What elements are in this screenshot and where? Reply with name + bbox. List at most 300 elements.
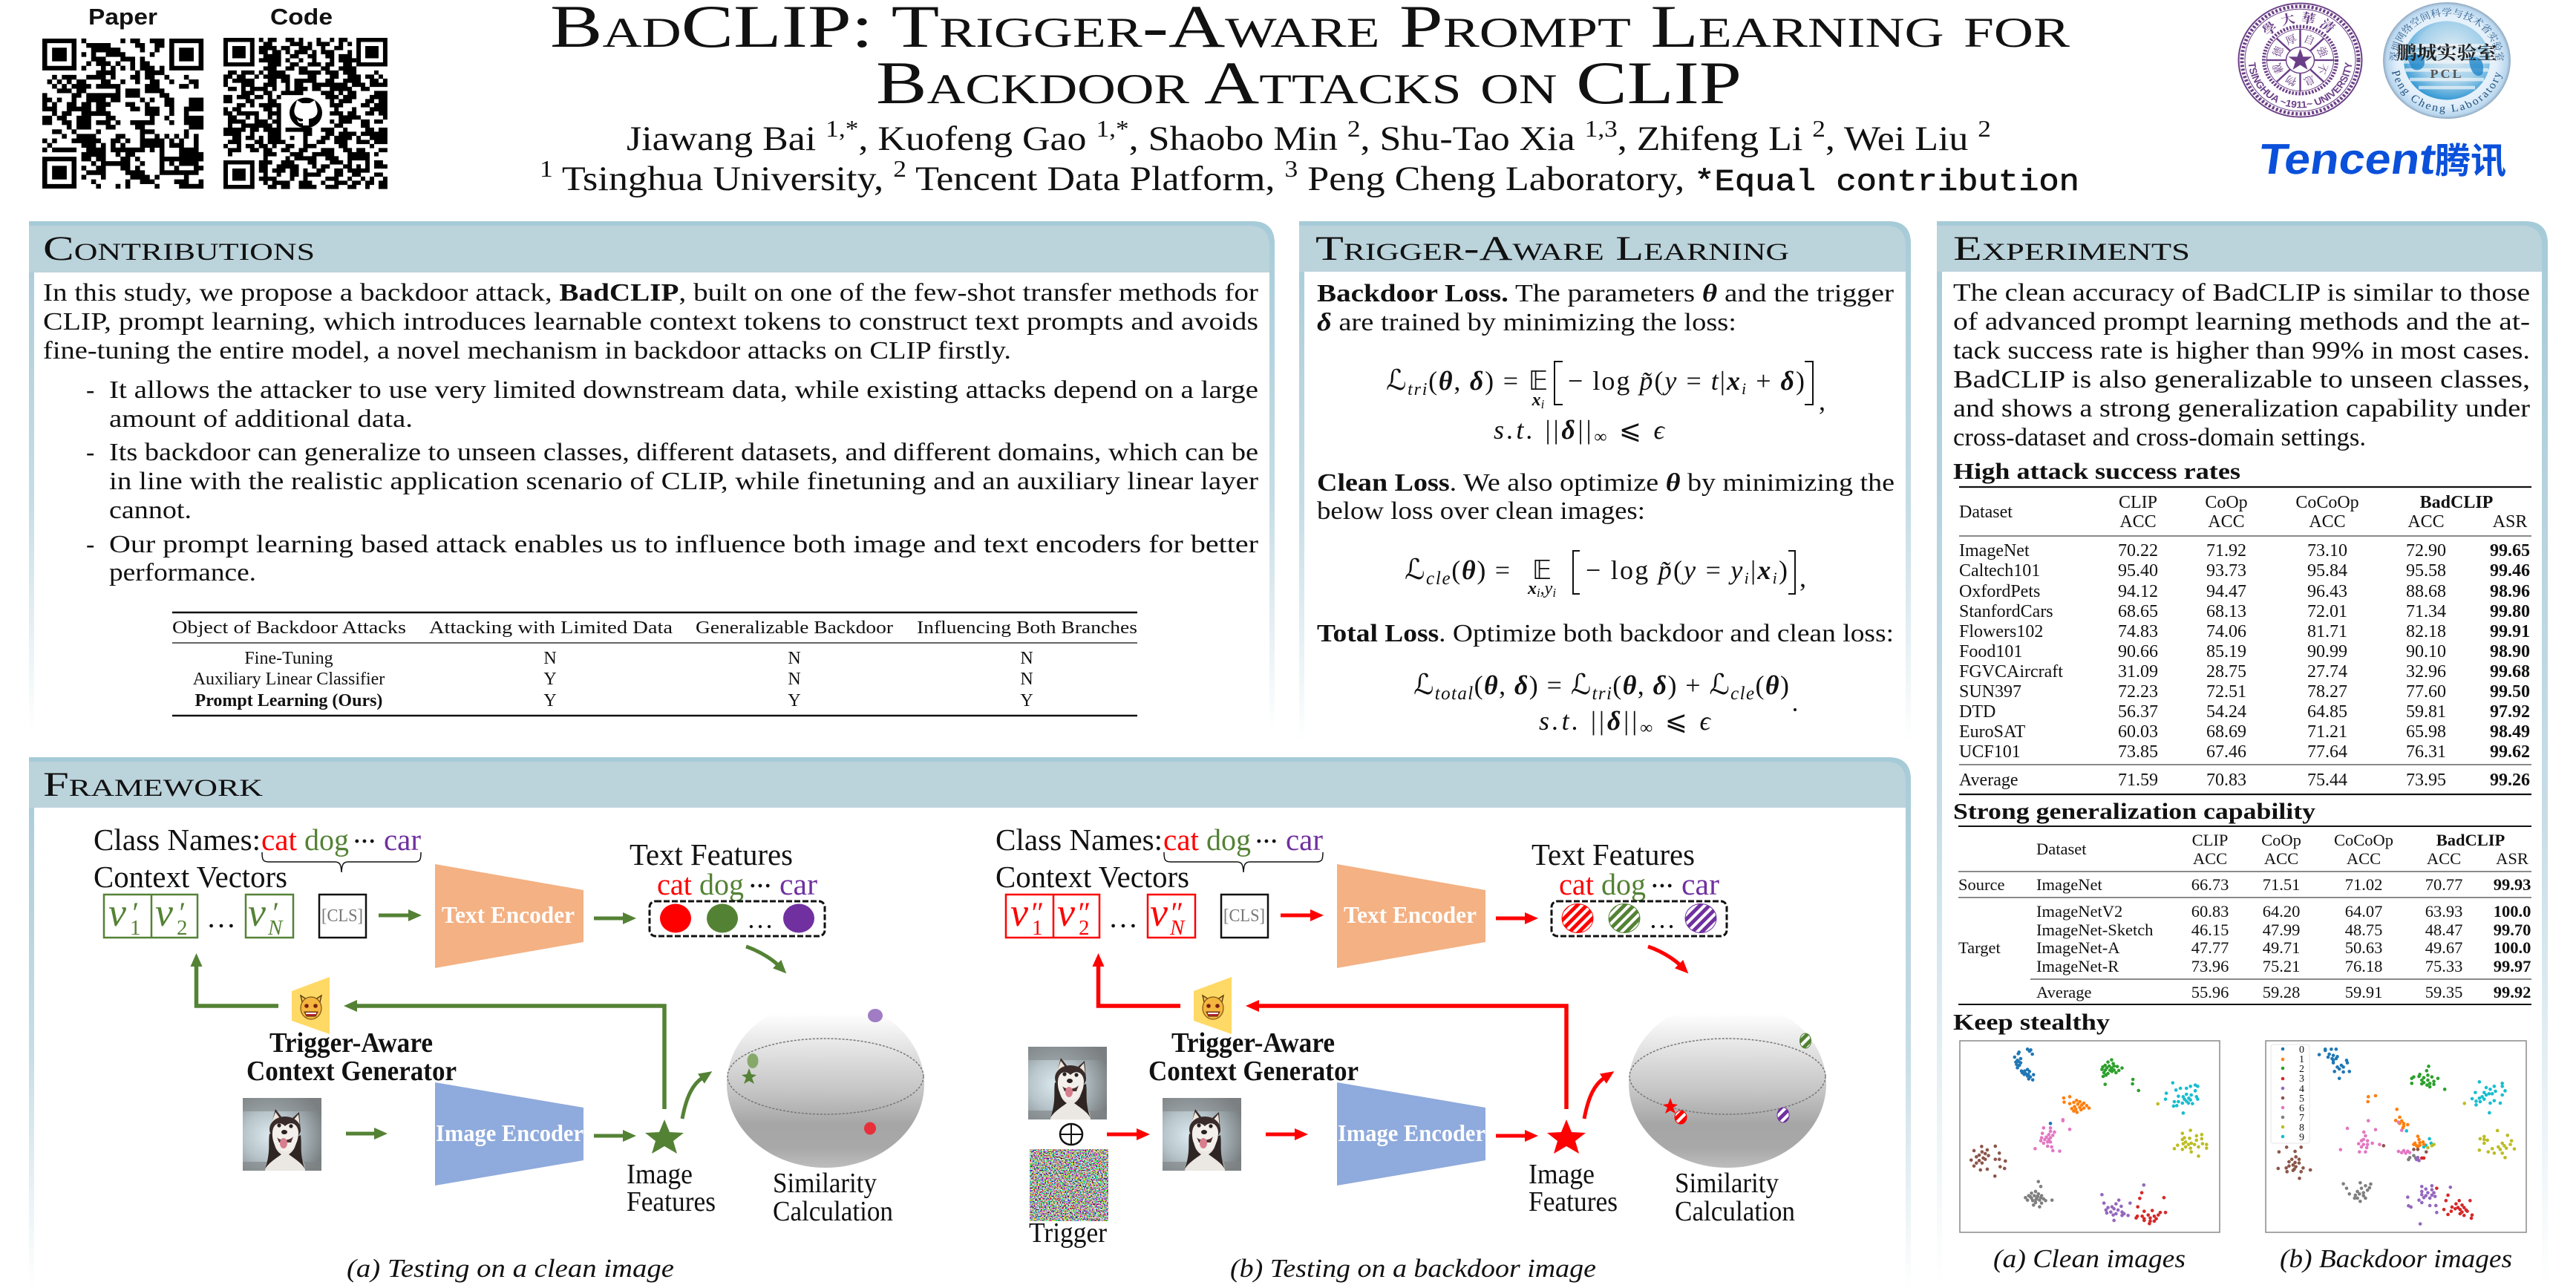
table: attack success rates: ACC — [2407, 512, 2445, 532]
table: generalization: 48.75 — [2345, 921, 2382, 939]
table: attack success rates: UCF101 — [1959, 742, 2021, 762]
comparison table: Y — [543, 691, 557, 710]
arrow: image features to generator — [356, 1006, 664, 1109]
affiliations: Tencent Data Platform, — [906, 160, 1285, 198]
bullet list: It allows the attacker to use very limited downstream data, while existing attacks depend on a large — [109, 376, 1258, 404]
authors: 2 — [1347, 115, 1361, 142]
equation: backdoor loss: i — [1541, 397, 1545, 411]
table: generalization: 47.77 — [2191, 938, 2229, 957]
logo: Peng Cheng Laboratory: Peng Cheng Laboratory — [2392, 70, 2503, 114]
table: attack success rates: 73.85 — [2118, 742, 2158, 762]
table: attack success rates: Flowers102 — [1959, 622, 2043, 641]
table: generalization: 59.91 — [2345, 983, 2382, 1001]
panel: trigger-aware learning — [1299, 221, 1911, 742]
logo: Peng Cheng Laboratory: 深圳网络空间科学与技术省实验室 — [2389, 7, 2505, 61]
context vectors: ″ — [1076, 896, 1090, 929]
text block: intro — [43, 279, 1259, 365]
class names: cat — [1163, 823, 1200, 857]
image features label: Image — [627, 1159, 693, 1190]
similarity calculation label: Similarity — [773, 1168, 877, 1199]
scatter plot: clean images — [1960, 1041, 2220, 1232]
logo: Peng Cheng Laboratory — [2383, 2, 2511, 119]
equation: total loss: ℒ — [1413, 668, 1434, 701]
table: generalization: Target — [1958, 938, 2001, 957]
bullet list: - — [86, 531, 94, 558]
table: attack success rates: 77.60 — [2406, 682, 2446, 702]
table: attack success rates: Caltech101 — [1959, 561, 2040, 581]
heading: High attack success rates: High attack success rates — [1953, 458, 2240, 484]
label: Paper: Paper — [88, 4, 157, 30]
bullet list: amount of additional data. — [109, 405, 413, 433]
text encoder: Text Encoder — [442, 901, 575, 928]
context vectors: 1 — [1032, 916, 1042, 940]
equation: total loss: ∞ — [1640, 719, 1653, 738]
table: attack success rates: 68.69 — [2206, 722, 2246, 742]
image features label — [627, 1159, 716, 1217]
bullet list: performance. — [109, 559, 256, 586]
equation: backdoor loss: + — [1748, 366, 1779, 396]
legend: 9 — [2299, 1132, 2304, 1143]
table: attack success rates: 71.21 — [2307, 722, 2347, 742]
table: attack success rates: ImageNet — [1959, 541, 2030, 560]
logo: Tsinghua University: 物 — [2284, 73, 2299, 88]
table: generalization: 100.0 — [2494, 938, 2531, 957]
context vectors: 2 — [177, 916, 187, 940]
legend: 0 — [2299, 1045, 2304, 1056]
equation: clean loss: θ) = — [1462, 555, 1510, 585]
table: generalization: 66.73 — [2191, 875, 2229, 894]
bullet list: cannot. — [109, 497, 192, 524]
icon: GitHub logo in QR — [290, 98, 322, 128]
text features: dog — [699, 867, 744, 901]
table: attack success rates: 70.22 — [2118, 541, 2158, 560]
class names: Class Names: — [94, 823, 261, 857]
trigger-aware context generator — [1148, 977, 1359, 1087]
table: generalization: 99.97 — [2494, 957, 2531, 975]
arrow: generator to context vectors — [196, 965, 278, 1006]
arrow — [1496, 1134, 1526, 1137]
equation: clean loss: | — [1750, 555, 1756, 585]
equation: total loss: ⩽ — [1655, 706, 1697, 736]
equation: backdoor loss: ( — [1428, 366, 1437, 396]
table: generalization: Source — [1958, 875, 2004, 894]
text block: experiment summary: tack success rate is higher than 99% in most cases. — [1953, 337, 2530, 365]
table: attack success rates: Dataset — [1959, 503, 2013, 522]
equation: backdoor loss: ℒ — [1386, 364, 1406, 396]
table: attack success rates: 99.46 — [2490, 561, 2530, 581]
table: attack success rates: 67.46 — [2206, 742, 2246, 762]
similarity calculation label: Similarity — [1675, 1168, 1779, 1199]
table: attack success rates: 73.10 — [2307, 541, 2347, 560]
table: generalization: 49.71 — [2263, 938, 2300, 957]
diagram: testing on a backdoor image — [996, 823, 1826, 1283]
heading: Contributions: Contributions — [43, 229, 315, 268]
table: attack success rates: ACC — [2119, 512, 2157, 532]
arrow — [594, 1134, 624, 1137]
arrow — [1266, 1133, 1296, 1136]
context vectors: 1 — [130, 916, 141, 940]
text features: … — [747, 904, 774, 934]
table: attack success rates: 90.99 — [2307, 642, 2347, 661]
table: attack success rates: 93.73 — [2206, 561, 2246, 581]
caption (a): (a) Testing on a clean image — [347, 1254, 674, 1283]
table: attack success rates: 95.84 — [2307, 561, 2347, 581]
class names — [996, 823, 1323, 872]
equation: clean loss: − log p̃(y = y — [1586, 555, 1742, 585]
legend: 5 — [2299, 1094, 2304, 1105]
comparison table: N — [788, 670, 801, 689]
comparison table: N — [1020, 649, 1033, 668]
authors: 1,* — [1096, 115, 1129, 142]
logo: Peng Cheng Laboratory: 鹏城实验室 — [2397, 43, 2497, 63]
table: generalization: 47.99 — [2263, 921, 2300, 939]
table: attack success rates: 74.83 — [2118, 622, 2158, 641]
table: attack success rates: 99.26 — [2490, 771, 2530, 790]
arrow — [1107, 1133, 1138, 1136]
legend: 4 — [2299, 1084, 2304, 1095]
text features — [1531, 837, 1727, 936]
table: generalization: Dataset — [2036, 840, 2087, 858]
affiliations: *Equal contribution — [1694, 166, 2079, 200]
comparison table: Y — [543, 670, 557, 689]
authors: 2 — [1812, 115, 1825, 142]
heading: Experiments: Experiments — [1953, 229, 2190, 268]
trigger-aware context generator: Trigger-Aware — [269, 1027, 433, 1059]
table: attack success rates: 31.09 — [2118, 662, 2158, 681]
trigger noise — [1030, 1149, 1108, 1221]
heading: Trigger-Aware Learning: Trigger-Aware Learning — [1315, 229, 1789, 268]
trigger-aware context generator: Context Generator — [1148, 1056, 1359, 1087]
equation: total loss — [1413, 668, 1797, 738]
legend: 6 — [2299, 1103, 2304, 1114]
authors: 1,3 — [1585, 115, 1618, 142]
similarity calculation label: Calculation — [773, 1196, 893, 1227]
table: attack success rates: SUN397 — [1959, 682, 2021, 702]
text features: Text Features — [630, 837, 793, 872]
authors: , Shu-Tao Xia — [1361, 120, 1585, 158]
table: attack success rates: 99.68 — [2490, 662, 2530, 681]
affiliations: Peng Cheng Laboratory, — [1298, 160, 1694, 198]
equation: total loss: θ, δ) = ℒ — [1484, 668, 1591, 701]
table: attack success rates: 32.96 — [2406, 662, 2446, 681]
logo: Tencent: Tencent — [2256, 135, 2439, 183]
text block: intro: fine-tuning the entire model, a novel mechanism in backdoor attacks on CLIP firstly. — [43, 337, 1011, 365]
image encoder — [1337, 1082, 1485, 1186]
table: attack success rates: 77.64 — [2307, 742, 2347, 762]
similarity calculation label — [773, 1168, 893, 1227]
equation: backdoor loss: δ) — [1781, 366, 1805, 396]
arrow — [1281, 913, 1312, 918]
equation: clean loss: ) — [1779, 555, 1788, 585]
logo: Tsinghua University: 厚 — [2284, 33, 2299, 48]
affiliations: 3 — [1285, 155, 1298, 182]
header: QR codes — [42, 4, 388, 189]
trigger-aware context generator: Trigger-Aware — [1171, 1027, 1335, 1059]
table: generalization: ACC — [2347, 849, 2381, 868]
text features: car — [779, 867, 817, 901]
equation: backdoor loss: x — [1532, 390, 1541, 410]
equation: backdoor loss: ⩽ — [1609, 415, 1651, 445]
table: attack success rates: BadCLIP — [2420, 493, 2493, 512]
table: attack success rates: 72.23 — [2118, 682, 2158, 702]
table: attack success rates: 68.13 — [2206, 602, 2246, 621]
table: attack success rates: StanfordCars — [1959, 602, 2053, 621]
text: backdoor loss — [1317, 280, 1895, 336]
table: attack success rates: 96.43 — [2307, 582, 2347, 601]
logo: Tsinghua University: 德 — [2270, 45, 2286, 59]
table: generalization: 63.93 — [2425, 902, 2462, 921]
equation: clean loss: i — [1537, 586, 1540, 600]
comparison table: Y — [1020, 691, 1033, 710]
text block: experiment summary: and shows a strong generalization capability under — [1953, 395, 2531, 422]
authors: , Shaobo Min — [1129, 120, 1347, 158]
comparison table: Object of Backdoor Attacks — [172, 618, 406, 638]
table: attack success rates: 82.18 — [2406, 622, 2446, 641]
equation: backdoor loss: 𝔼 — [1529, 366, 1548, 396]
label: trigger: Trigger — [1029, 1217, 1107, 1249]
table: generalization — [1958, 826, 2531, 1004]
table: generalization: 100.0 — [2494, 902, 2531, 921]
text block: experiment summary: The clean accuracy of BadCLIP is similar to those — [1953, 279, 2530, 307]
table: attack success rates: FGVCAircraft — [1959, 662, 2063, 681]
text: backdoor loss: δ are trained by minimizing the loss: — [1317, 309, 1736, 336]
table: generalization: 71.51 — [2263, 875, 2300, 894]
equation: clean loss: x — [1528, 579, 1537, 598]
equation: total loss: ( — [1612, 670, 1621, 700]
image encoder: Image Encoder — [436, 1119, 583, 1146]
equation: backdoor loss: ∞ — [1594, 428, 1606, 447]
table: attack success rates: 70.83 — [2206, 771, 2246, 790]
heading: Keep stealthy: Keep stealthy — [1953, 1009, 2111, 1035]
table: generalization: 71.02 — [2345, 875, 2382, 894]
class names: ··· — [1254, 824, 1279, 858]
class names: dog — [304, 823, 349, 857]
table: generalization: ImageNet-A — [2036, 938, 2120, 957]
table: attack success rates: 99.91 — [2490, 622, 2530, 641]
text encoder — [1337, 864, 1485, 968]
context vectors: [CLS] — [1223, 906, 1265, 926]
table: attack success rates: 90.66 — [2118, 642, 2158, 661]
class names: Class Names: — [996, 823, 1163, 857]
similarity calculation label — [1675, 1168, 1795, 1227]
image encoder: Image Encoder — [1338, 1119, 1485, 1146]
context vectors: v — [1010, 890, 1028, 935]
equation: backdoor loss — [1386, 362, 1825, 447]
affiliations: Tsinghua University, — [553, 160, 893, 198]
text features: dog — [1601, 867, 1646, 901]
table: attack success rates: 71.34 — [2406, 602, 2446, 621]
logo: Tsinghua University: 不 — [2314, 62, 2330, 76]
bullet list: - — [86, 439, 94, 466]
table: attack success rates: EuroSAT — [1959, 722, 2026, 742]
similarity calculation label: Calculation — [1675, 1196, 1795, 1227]
panel: contributions — [29, 221, 1275, 731]
heading: Strong generalization capability: Strong generalization capability — [1953, 798, 2316, 824]
logo: Tsinghua University: 息 — [2301, 73, 2317, 88]
class names: cat — [261, 823, 298, 857]
legend: 3 — [2299, 1073, 2304, 1085]
table: attack success rates: 95.40 — [2118, 561, 2158, 581]
table: generalization: 70.77 — [2425, 875, 2462, 894]
table: attack success rates: 28.75 — [2206, 662, 2246, 681]
image features label: Features — [627, 1186, 716, 1217]
logo: Tsinghua University: TSINGHUA ~1911~ UNIVERSITY — [2248, 62, 2352, 108]
arrow: image features to sphere — [1584, 1078, 1604, 1119]
bullet list: Its backdoor can generalize to unseen classes, different datasets, and different domains, which can be — [109, 439, 1258, 466]
logo: Tencent: 腾讯 — [2435, 131, 2506, 183]
text block: experiment summary: of advanced prompt learning methods and the at- — [1953, 308, 2530, 336]
comparison table: Y — [788, 691, 801, 710]
table: attack success rates: 98.90 — [2490, 642, 2530, 661]
text: backdoor loss: Backdoor Loss. The parameters θ and the trigger — [1317, 280, 1895, 307]
table: attack success rates: 78.27 — [2307, 682, 2347, 702]
context vectors: 2 — [1079, 916, 1090, 940]
text: clean loss: Clean Loss . We also optimize θ by minimizing the — [1317, 469, 1895, 497]
table: generalization: ACC — [2193, 849, 2227, 868]
context vectors: [CLS] — [321, 906, 363, 926]
table: generalization: ACC — [2427, 849, 2461, 868]
logo: Tsinghua University: 自 — [2301, 33, 2317, 48]
table: attack success rates: 76.31 — [2406, 742, 2446, 762]
context vectors: v — [1150, 890, 1168, 935]
context vectors: ′ — [271, 896, 278, 929]
table: generalization: ACC — [2264, 849, 2298, 868]
text features: Text Features — [1531, 837, 1695, 872]
table: attack success rates: 56.37 — [2118, 702, 2158, 722]
context vectors: v — [248, 890, 266, 935]
equation: clean loss: i — [1773, 569, 1777, 587]
context vectors: N — [1169, 916, 1186, 940]
logo: Tsinghua University: 學大華清 — [2262, 11, 2335, 34]
trigger-aware context generator: Context Generator — [246, 1056, 457, 1087]
comparison table — [172, 612, 1137, 716]
table: attack success rates: 88.68 — [2406, 582, 2446, 601]
table: attack success rates: 95.58 — [2406, 561, 2446, 581]
text features: ··· — [1650, 869, 1675, 903]
poisoned dog image — [1163, 1098, 1241, 1171]
text features: cat — [1559, 867, 1595, 901]
image features label — [1529, 1159, 1618, 1217]
table: generalization: 59.28 — [2263, 983, 2300, 1001]
context vectors: ′ — [131, 896, 138, 929]
arrow: text features to sphere — [746, 947, 778, 965]
table: attack success rates: 72.90 — [2406, 541, 2446, 560]
comparison table: N — [788, 649, 801, 668]
text features: … — [1649, 904, 1676, 934]
arrow — [346, 1131, 376, 1136]
star: image feature — [645, 1119, 684, 1154]
clean dog image — [1028, 1047, 1107, 1119]
table: attack success rates: 65.98 — [2406, 722, 2446, 742]
table: attack success rates: 74.06 — [2206, 622, 2246, 641]
logo: Tsinghua University: 強 — [2314, 45, 2330, 59]
text block: experiment summary: BadCLIP is also generalizable to unseen classes, — [1953, 366, 2530, 393]
bullet list: Our prompt learning based attack enables us to influence both image and text encoders for better — [109, 531, 1259, 558]
comparison table: Attacking with Limited Data — [429, 618, 673, 638]
authors: 1,* — [826, 115, 858, 142]
text features: cat — [657, 867, 693, 901]
label: Code: Code — [270, 4, 333, 30]
authors: 2 — [1978, 115, 1991, 142]
table: attack success rates: Food101 — [1959, 642, 2022, 661]
table: attack success rates: 98.49 — [2490, 722, 2530, 742]
table: attack success rates: 99.65 — [2490, 541, 2530, 560]
table: generalization: 48.47 — [2425, 921, 2462, 939]
table: generalization: 99.93 — [2494, 875, 2531, 894]
table: attack success rates: 72.51 — [2206, 682, 2246, 702]
table: generalization: ImageNet — [2036, 875, 2102, 894]
table: attack success rates: 54.24 — [2206, 702, 2246, 722]
text: clean loss — [1317, 469, 1895, 525]
table: attack success rates: 94.12 — [2118, 582, 2158, 601]
table: attack success rates: 75.44 — [2307, 771, 2347, 790]
logo: Tencent — [2256, 131, 2506, 183]
caption (b): (b) Testing on a backdoor image — [1230, 1254, 1596, 1283]
table: generalization: 50.63 — [2345, 938, 2382, 957]
comparison table: Prompt Learning (Ours) — [195, 691, 382, 710]
table: attack success rates: 99.50 — [2490, 682, 2530, 702]
table: attack success rates: 59.81 — [2406, 702, 2446, 722]
text block: intro: In this study, we propose a backdoor attack, BadCLIP , built on one of the few-shot transfer methods for — [43, 279, 1259, 307]
table: attack success rates: 68.65 — [2118, 602, 2158, 621]
equation: backdoor loss: − log p̃(y = t|x — [1568, 366, 1740, 396]
table: generalization: 60.83 — [2191, 902, 2229, 921]
table: generalization: 55.96 — [2191, 983, 2229, 1001]
logo: Tsinghua University: 載 — [2270, 62, 2286, 76]
table: attack success rates: CLIP — [2119, 493, 2157, 512]
text features: car — [1681, 867, 1719, 901]
table: attack success rates: 60.03 — [2118, 722, 2158, 742]
equation: backdoor loss: s.t. ||δ|| — [1494, 415, 1592, 445]
similarity sphere — [1629, 1000, 1826, 1168]
text block: intro: CLIP, prompt learning, which introduces learnable context tokens to construct text prompts and avoids — [43, 308, 1258, 336]
table: generalization: CLIP — [2192, 831, 2228, 849]
text encoder: Text Encoder — [1344, 901, 1477, 928]
equation: total loss: ( — [1474, 670, 1483, 700]
comparison table: Auxiliary Linear Classifier — [193, 670, 385, 689]
table: generalization: 49.67 — [2425, 938, 2462, 957]
arrow — [594, 916, 624, 921]
table: generalization: CoCoOp — [2334, 831, 2393, 849]
context vectors — [996, 860, 1268, 940]
text features — [630, 837, 825, 936]
bullet list — [86, 376, 1259, 586]
panel: experiments — [1937, 221, 2548, 1288]
class names: car — [1286, 823, 1323, 857]
panel: framework — [29, 757, 1911, 1288]
QR code: code repository — [223, 38, 388, 189]
authors: , Wei Liu — [1825, 120, 1978, 158]
table: attack success rates: CoCoOp — [2295, 493, 2359, 512]
equation: backdoor loss: i — [1742, 379, 1746, 398]
table: attack success rates: 97.92 — [2490, 702, 2530, 722]
comparison table: N — [543, 649, 557, 668]
heading: Framework: Framework — [43, 765, 263, 804]
equation: total loss: θ) — [1765, 670, 1789, 700]
legend: 8 — [2299, 1122, 2304, 1134]
title: Backdoor Attacks on CLIP — [876, 49, 1742, 117]
table: attack success rates: 72.01 — [2307, 602, 2347, 621]
equation: total loss: total — [1435, 684, 1473, 704]
table: generalization: 99.92 — [2494, 983, 2531, 1001]
context vectors: v — [1057, 890, 1075, 935]
image encoder — [435, 1082, 583, 1186]
comparison table: Influencing Both Branches — [917, 618, 1137, 638]
dog image — [243, 1098, 321, 1171]
table: attack success rates: 71.92 — [2206, 541, 2246, 560]
table: attack success rates: DTD — [1959, 702, 1995, 722]
comparison table: Fine-Tuning — [244, 649, 333, 668]
